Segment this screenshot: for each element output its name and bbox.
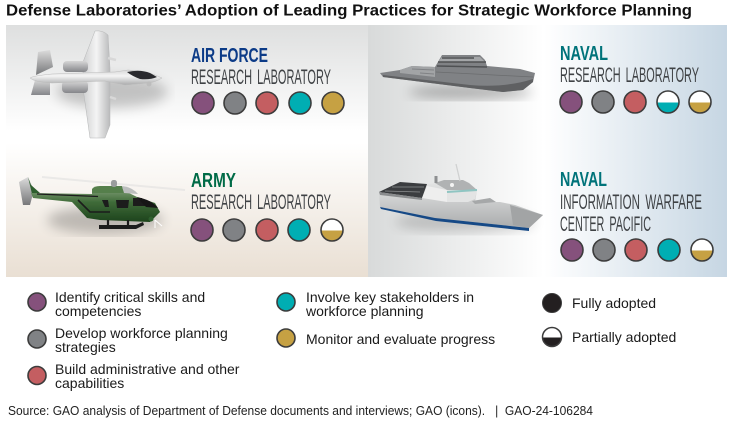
legend item: involve: workforce planning [305,303,424,319]
panel: Naval Information Warfare Center Pacific [368,143,727,277]
legend item: build: capabilities [55,375,124,391]
legend item: identify: Identify critical skills and [55,289,205,305]
heading: ARMY [191,170,237,192]
legend item: involve: Involve key stakeholders in [306,289,474,305]
adoption ratings [192,92,344,114]
legend item: build [28,361,240,391]
source note: Source: GAO analysis of Department of Defense documents and interviews; GAO (icons). | GAO-24-106284 [8,404,593,418]
adoption ratings [191,219,343,242]
panel: Naval Research Laboratory [368,25,727,143]
legend item: identify: competencies [55,303,141,319]
legend: adoption status [542,294,676,347]
heading: AIR FORCE [191,45,268,67]
adoption ratings [560,91,711,114]
legend item: develop: strategies [55,339,116,355]
panel: Air Force Research Laboratory [6,25,368,143]
icon: attack aircraft [30,31,168,138]
legend item: identify [28,289,205,319]
legend item: fully adopted: Fully adopted [572,295,656,311]
subheading: RESEARCH LABORATORY [191,191,331,214]
legend item: build: Build administrative and other [55,361,240,377]
icon: littoral combat ship [379,164,543,232]
legend item: involve [277,289,474,319]
heading: NAVAL [560,43,608,65]
legend: practices [28,289,495,391]
heading: NAVAL [560,169,607,191]
legend item: develop [28,325,228,355]
panel: Army Research Laboratory [6,143,368,277]
legend item: develop: Develop workforce planning [55,325,228,341]
adoption ratings [561,239,713,262]
icon: helicopter [19,177,185,234]
title: Defense Laboratories’ Adoption of Leading Practices for Strategic Workforce Planning [6,2,692,20]
subheading: RESEARCH LABORATORY [191,66,331,89]
icon: stealth ship, gray [380,55,535,99]
legend item: partially adopted: Partially adopted [572,329,676,345]
legend item: monitor: Monitor and evaluate progress [306,331,495,347]
subheading line 2: CENTER PACIFIC [560,213,651,236]
